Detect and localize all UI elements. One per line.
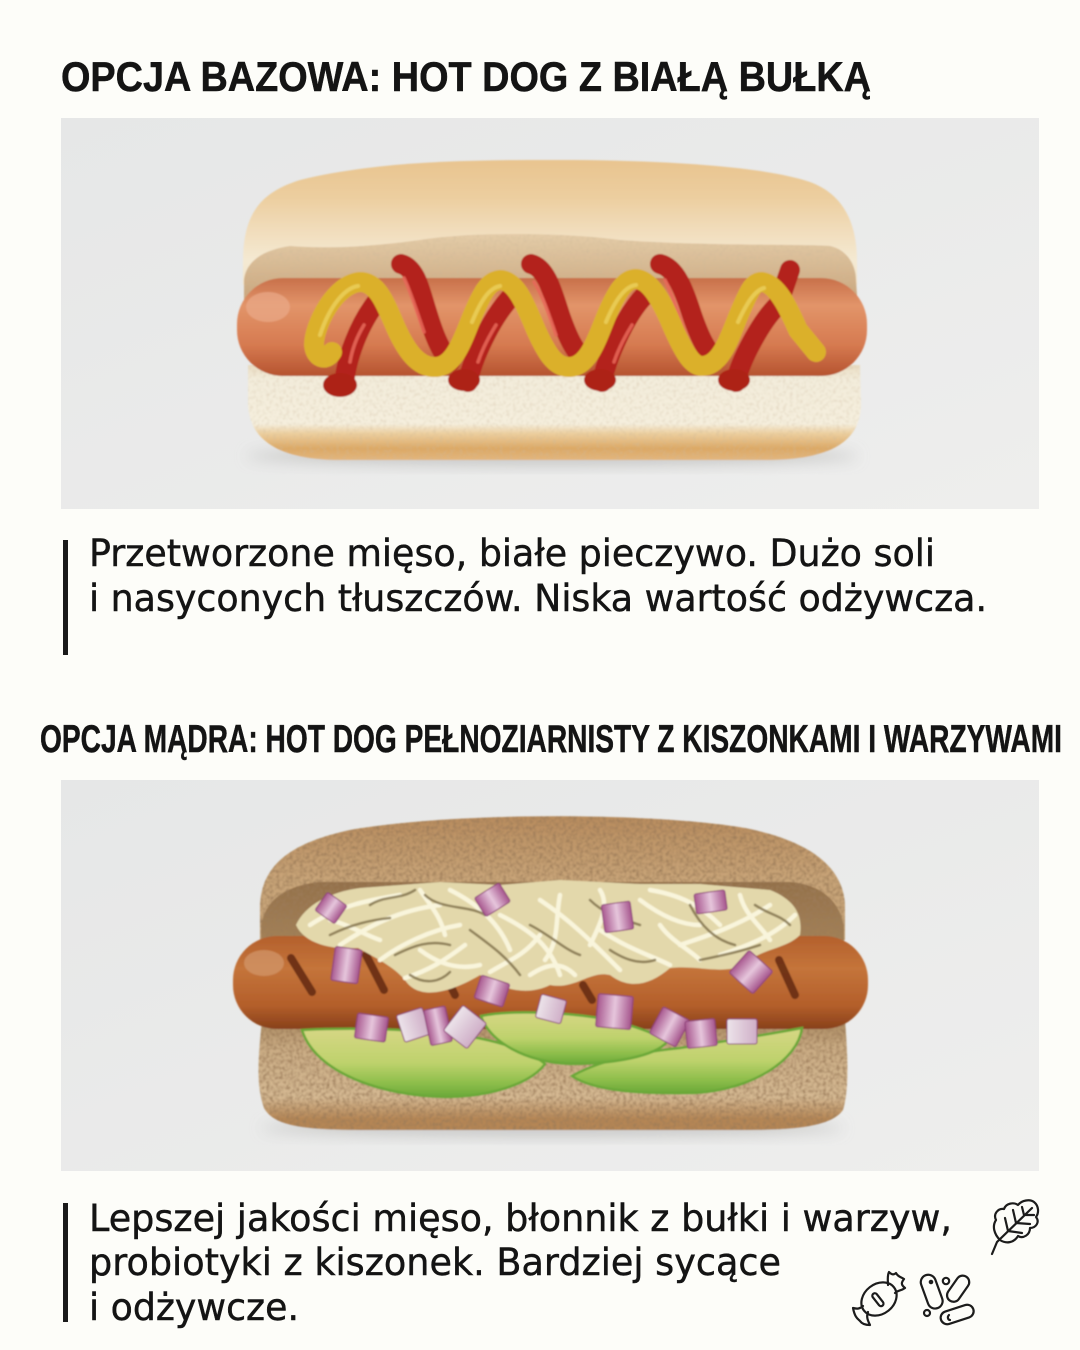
icon: candy <box>853 1272 905 1325</box>
text block: basic option description: i nasyconych tłuszczów. Niska wartość odżywcza. <box>89 577 987 620</box>
sauerkraut <box>296 880 801 993</box>
grilled sausage <box>233 936 868 1029</box>
panel: whole-grain hot dog photo <box>61 780 1039 1171</box>
ketchup <box>344 264 790 385</box>
sausage <box>237 278 867 376</box>
text block: basic option description: Przetworzone mięso, białe pieczywo. Dużo soli <box>89 532 935 575</box>
top bun <box>243 160 857 285</box>
icon: bacteria <box>919 1273 975 1326</box>
bottom bun <box>248 365 861 460</box>
text block: smart option description <box>89 1197 952 1329</box>
top bun crumb <box>244 234 858 310</box>
icon: leaf <box>992 1200 1038 1254</box>
whole-grain top bun <box>260 816 845 940</box>
accent bar: smart option <box>63 1203 68 1322</box>
panel: white-bun hot dog photo <box>61 118 1039 509</box>
avocado slices <box>302 1012 802 1097</box>
mustard <box>314 279 816 367</box>
text block: smart option description: i odżywcze. <box>89 1286 299 1329</box>
text block: basic option description <box>89 532 987 620</box>
ketchup pools <box>323 369 750 397</box>
whole-grain bottom bun <box>258 1020 847 1130</box>
top bun crumb <box>261 882 844 950</box>
illustration: white-bun hot dog <box>237 160 867 466</box>
text block: smart option description: Lepszej jakości mięso, błonnik z bułki i warzyw, <box>89 1197 952 1240</box>
text block: smart option description: probiotyki z kiszonek. Bardziej sycące <box>89 1241 781 1284</box>
accent bar: basic option <box>63 540 68 655</box>
heading: basic option: OPCJA BAZOWA: HOT DOG Z BIAŁĄ BUŁKĄ <box>61 53 871 100</box>
red onion pieces <box>315 883 773 1049</box>
illustration: whole-grain hot dog <box>233 816 868 1137</box>
